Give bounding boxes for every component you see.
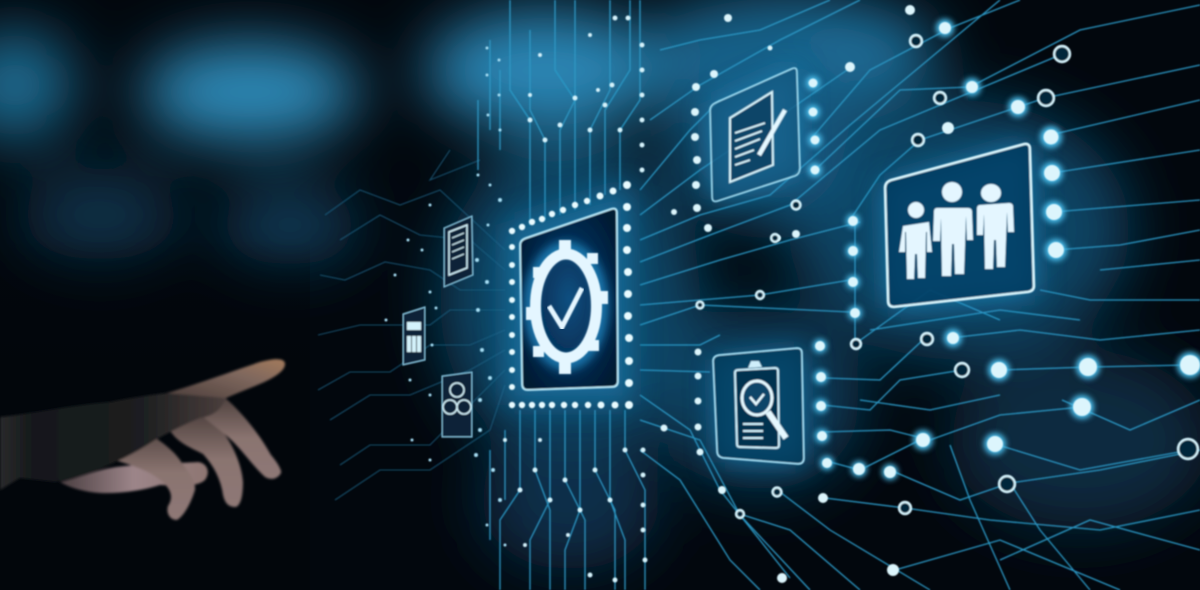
circuit lines: top, bottom and right field with glow (478, 0, 1200, 590)
icon: check mark (549, 288, 582, 327)
icon: gear (526, 240, 608, 374)
icon: person centre (933, 182, 973, 276)
small icon: linked circles (442, 372, 472, 437)
icon: person left (899, 202, 932, 279)
dot glow layer (806, 19, 1200, 480)
icon panel: three people (885, 144, 1034, 307)
pointing hand (0, 359, 285, 520)
small icon: document (444, 216, 473, 287)
right field ring nodes (696, 35, 1198, 518)
index finger highlight (167, 359, 285, 398)
central chip: gear and check icon (520, 208, 618, 390)
dark fade under background lights on the left (0, 240, 310, 590)
pinky finger (115, 425, 195, 520)
palm and index finger (0, 359, 285, 490)
thumb (60, 462, 208, 493)
ring finger (165, 412, 243, 507)
left small dots (384, 46, 506, 546)
right field dots (660, 5, 1200, 583)
icon panel: document and pen (710, 68, 800, 202)
top and bottom circuit dots (503, 16, 648, 582)
chip perimeter dots (509, 181, 633, 409)
circuit lines: left faint (318, 150, 505, 500)
glow behind icons (505, 66, 1035, 465)
icon: person right (977, 184, 1014, 269)
icon panel: clipboard and magnifier (713, 348, 804, 464)
gear glow (530, 248, 602, 364)
middle finger (200, 397, 281, 479)
small icon: team chart (403, 307, 425, 365)
